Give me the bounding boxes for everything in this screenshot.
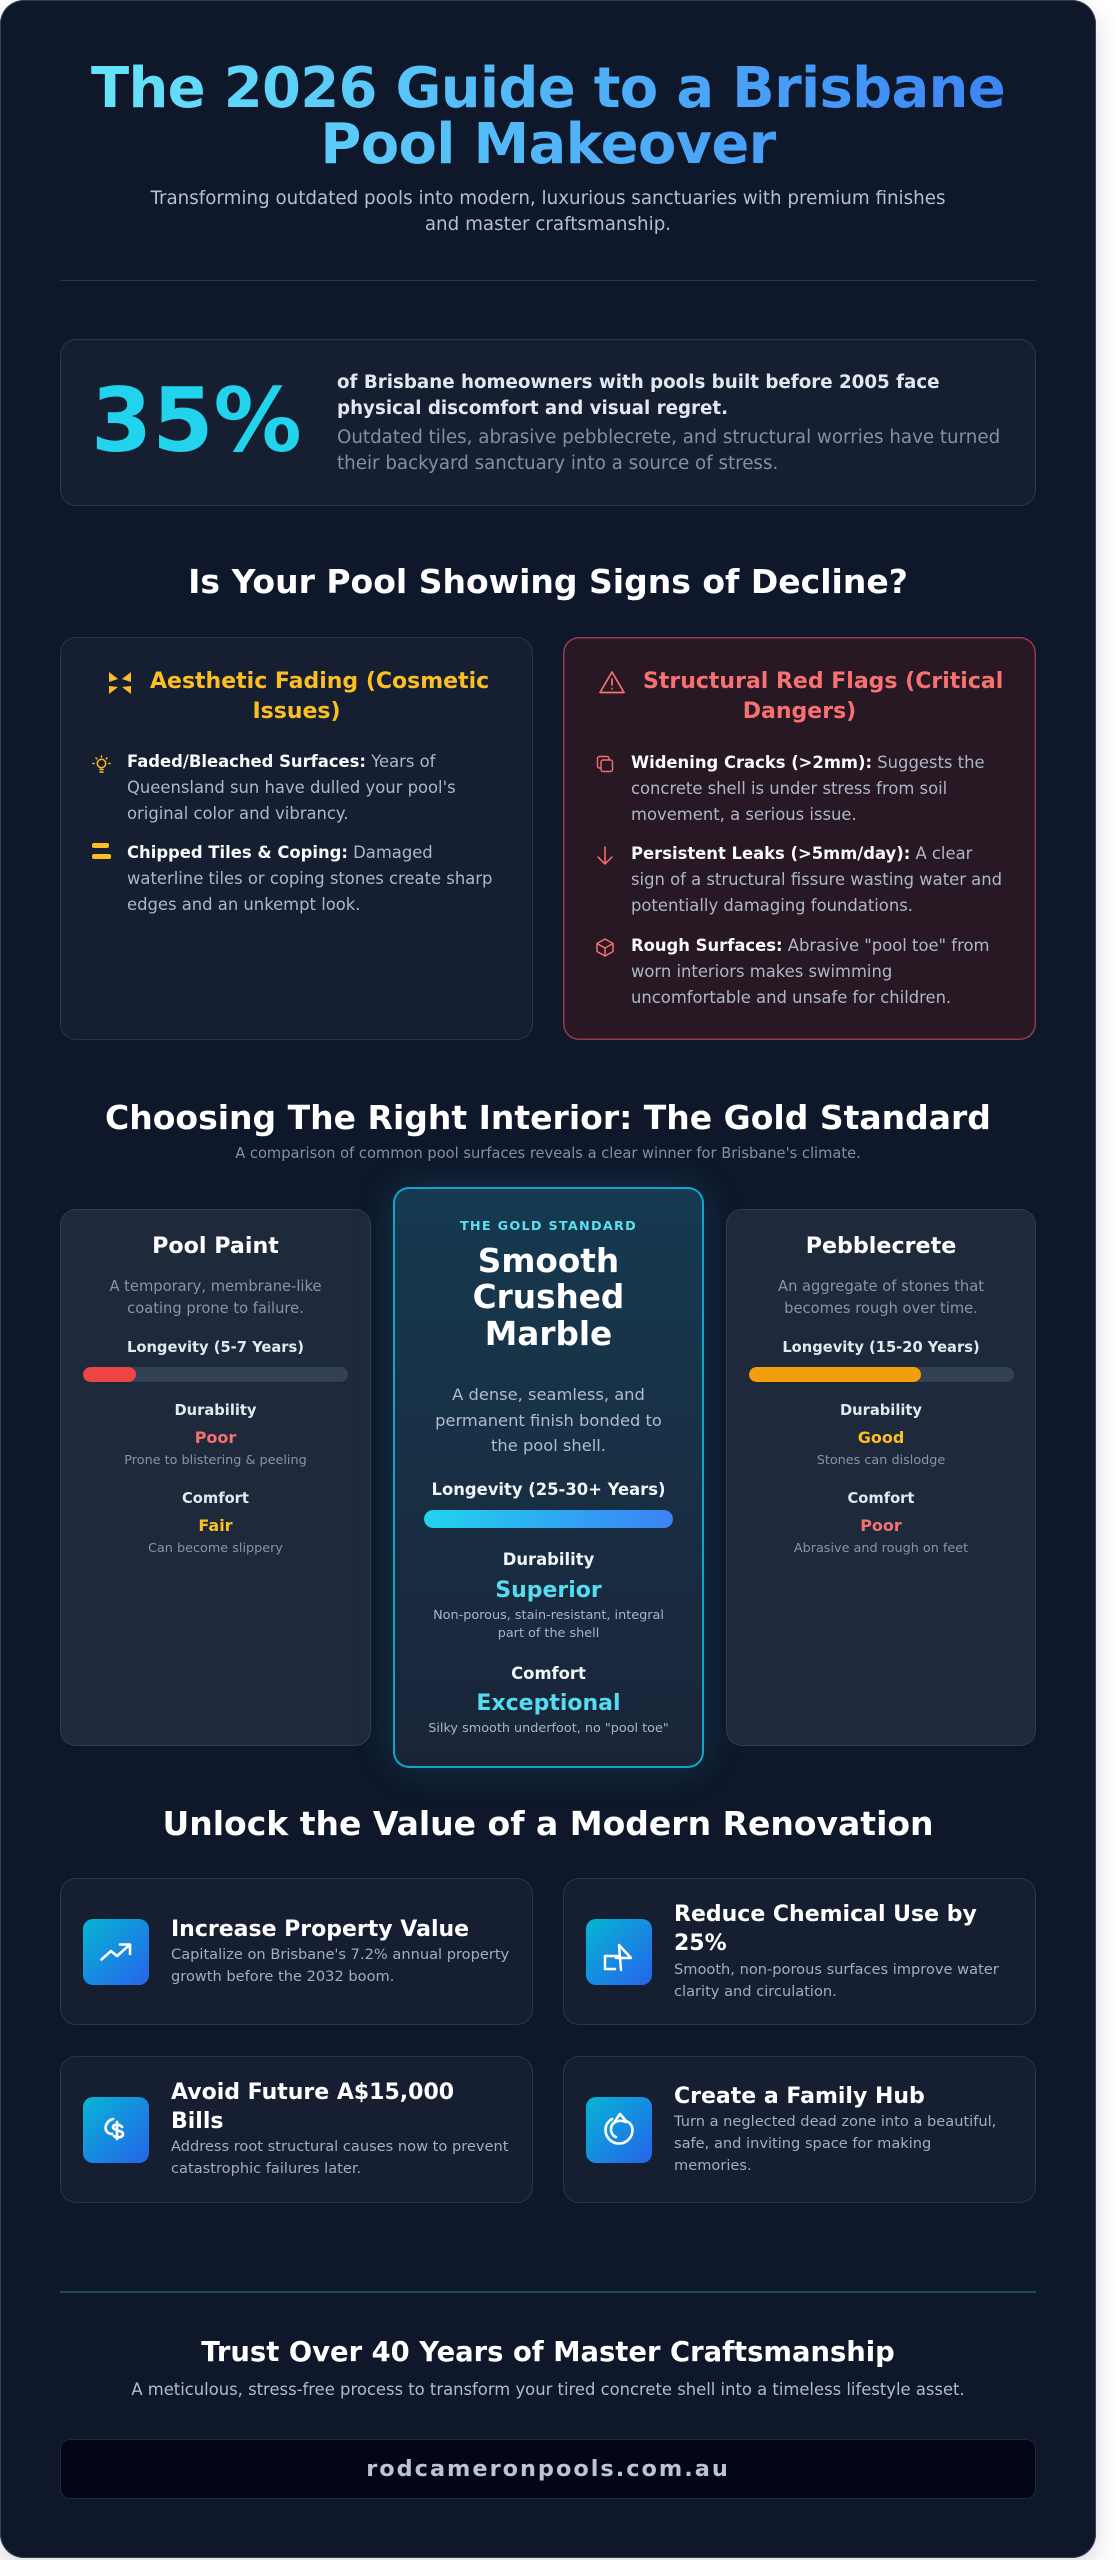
benefit description: Address root structural causes now to prevent: [171, 2138, 508, 2155]
footer heading: Trust Over 40 Years of Master Craftsmanship: [201, 2337, 895, 2368]
list item: cracks: [631, 753, 985, 824]
list item: leaks: Persistent Leaks (>5mm/day): A clear: [631, 844, 972, 863]
benefit description: Turn a neglected dead zone into a beautiful,: [674, 2113, 996, 2130]
card description: An aggregate of stones that: [778, 1278, 984, 1294]
list item: leaks: [631, 844, 1002, 915]
icon: dollar: [83, 2097, 149, 2163]
list item: rough surfaces: [631, 936, 989, 1007]
comfort label: Comfort: [511, 1664, 586, 1683]
list item: cracks: movement, a serious issue.: [631, 805, 857, 824]
stat headline: of Brisbane homeowners with pools built before 2005 face: [337, 372, 940, 393]
heading: unlock value: Unlock the Value of a Modern Renovation: [162, 1804, 934, 1843]
longevity label: Longevity (25-30+ Years): [432, 1480, 665, 1499]
section subheading: A comparison of common pool surfaces reveals a clear winner for Brisbane's climate.: [235, 1145, 861, 1162]
icon: aesthetic: [109, 672, 131, 694]
benefit description: catastrophic failures later.: [171, 2160, 361, 2177]
icon: family hub: [586, 2097, 652, 2163]
comfort note: Silky smooth underfoot, no "pool toe": [428, 1721, 669, 1736]
website callout: [60, 2439, 1036, 2499]
longevity bar: [424, 1510, 673, 1528]
benefit description: [674, 2113, 996, 2174]
list item: faded surfaces: original color and vibrancy.: [127, 804, 349, 823]
list item: leaks: sign of a structural fissure wasting water and: [631, 870, 1002, 889]
list item: chipped tiles: edges and an unkempt look.: [127, 895, 361, 914]
list item: faded surfaces: Queensland sun have dulled your pool's: [127, 778, 456, 797]
card title: Pool Paint: [152, 1233, 279, 1259]
panel: pebblecrete: [726, 1209, 1036, 1746]
benefit description: memories.: [674, 2157, 752, 2174]
durability rating: Good: [858, 1428, 904, 1447]
list item: cracks: concrete shell is under stress from soil: [631, 779, 947, 798]
durability label: Durability: [174, 1402, 256, 1419]
list item: chipped tiles: [127, 843, 492, 914]
stat description: Outdated tiles, abrasive pebblecrete, and structural worries have turned: [337, 427, 1000, 448]
panel: pool paint: [60, 1209, 371, 1746]
durability note: Stones can dislodge: [817, 1453, 945, 1468]
comfort rating: Poor: [860, 1516, 902, 1535]
list item: rough surfaces: uncomfortable and unsafe for children.: [631, 988, 951, 1007]
badge: THE GOLD STANDARD: [460, 1219, 637, 1234]
panel: increase property value: [60, 1878, 533, 2025]
comfort rating: Exceptional: [476, 1691, 621, 1716]
card description: coating prone to failure.: [127, 1300, 304, 1316]
title: Pool Makeover: [320, 112, 776, 177]
comfort label: Comfort: [182, 1490, 249, 1507]
panel: reduce chemical use: [563, 1878, 1036, 2025]
icon: box: [596, 938, 614, 957]
benefit title: Bills: [171, 2108, 224, 2134]
stat headline: [337, 372, 940, 419]
icon: bulb: [92, 755, 111, 773]
durability note: Prone to blistering & peeling: [124, 1453, 307, 1468]
card description: the pool shell.: [491, 1436, 606, 1455]
panel: structural red flags: [563, 637, 1036, 1040]
card description: A dense, seamless, and: [452, 1385, 645, 1404]
longevity label: Longevity (15-20 Years): [782, 1339, 980, 1356]
panel: family hub: [563, 2056, 1036, 2203]
panel: avoid future bills: [60, 2056, 533, 2203]
website callout: rodcameronpools.com.au: [366, 2456, 730, 2482]
list item: faded surfaces: [127, 752, 456, 823]
panel heading second line: Issues): [252, 699, 341, 724]
benefit description: [674, 1961, 999, 2000]
durability rating: Poor: [195, 1428, 236, 1447]
icon: trending up: [83, 1919, 149, 1985]
title: The 2026 Guide to a Brisbane: [91, 56, 1005, 121]
durability note: [433, 1608, 664, 1641]
icon: arrow down: [597, 846, 613, 865]
longevity label: Longevity (5-7 Years): [127, 1339, 304, 1356]
stat description: their backyard sanctuary into a source of stress.: [337, 453, 778, 474]
stat number: 35%: [91, 369, 302, 472]
icon: chipped tiles: [92, 843, 111, 859]
list item: rough surfaces: worn interiors makes swimming: [631, 962, 892, 981]
durability note: Non-porous, stain-resistant, integral: [433, 1608, 664, 1623]
benefit description: Smooth, non-porous surfaces improve water: [674, 1961, 999, 1978]
card title: Marble: [485, 1315, 612, 1353]
heading: choosing interior: Choosing The Right Interior: The Gold Standard: [105, 1098, 991, 1137]
durability label: Durability: [503, 1550, 594, 1569]
card description: [778, 1278, 984, 1316]
list item: cracks: Widening Cracks (>2mm): Suggests the: [631, 753, 985, 772]
card title: Crushed: [473, 1278, 624, 1316]
heading: signs of decline: Is Your Pool Showing Signs of Decline?: [188, 562, 908, 601]
comfort note: Can become slippery: [148, 1541, 283, 1556]
benefit title: 25%: [674, 1930, 727, 1956]
list item: chipped tiles: waterline tiles or coping stones create sharp: [127, 869, 492, 888]
benefit description: [171, 1946, 509, 1985]
card description: [435, 1385, 662, 1455]
benefit description: clarity and circulation.: [674, 1983, 837, 2000]
card title: [473, 1242, 624, 1353]
list item: rough surfaces: Rough Surfaces: Abrasive "pool toe" from: [631, 936, 989, 955]
durability rating: Superior: [495, 1578, 602, 1603]
panel heading: Aesthetic Fading (Cosmetic: [150, 669, 489, 694]
longevity bar: [749, 1367, 1014, 1382]
comfort label: Comfort: [848, 1490, 914, 1507]
card description: A temporary, membrane-like: [109, 1278, 322, 1294]
card description: permanent finish bonded to: [435, 1411, 662, 1430]
card title: Pebblecrete: [806, 1233, 956, 1259]
panel heading second line: Dangers): [743, 699, 856, 724]
list item: faded surfaces: Faded/Bleached Surfaces: Years of: [127, 752, 435, 771]
benefit title: Increase Property Value: [171, 1916, 469, 1942]
durability note: part of the shell: [498, 1626, 599, 1641]
benefit title: [171, 2080, 454, 2134]
benefit title: Avoid Future A$15,000: [171, 2080, 454, 2104]
icon: cracks: [596, 756, 614, 772]
icon: chemical: [586, 1919, 652, 1985]
card description: [109, 1278, 322, 1316]
benefit description: safe, and inviting space for making: [674, 2135, 931, 2152]
comfort note: Abrasive and rough on feet: [794, 1541, 968, 1556]
subtitle: and master craftsmanship.: [425, 214, 671, 235]
title: [60, 61, 1036, 173]
longevity bar: [83, 1367, 348, 1382]
list item: chipped tiles: Chipped Tiles & Coping: Damaged: [127, 843, 433, 862]
panel: smooth crushed marble: [393, 1187, 704, 1768]
subtitle: Transforming outdated pools into modern, luxurious sanctuaries with premium finishes: [150, 188, 946, 209]
subtitle: [150, 188, 946, 235]
panel: 35% stat: [60, 339, 1036, 506]
panel heading: Structural Red Flags (Critical: [643, 669, 1003, 694]
stat headline: physical discomfort and visual regret.: [337, 398, 728, 419]
panel: aesthetic fading: [60, 637, 533, 1040]
benefit title: Reduce Chemical Use by: [674, 1902, 977, 1926]
comfort rating: Fair: [198, 1516, 233, 1535]
footer description: A meticulous, stress-free process to transform your tired concrete shell into a timeless lifestyle asset.: [131, 2380, 965, 2399]
card title: Smooth: [478, 1242, 619, 1280]
card description: becomes rough over time.: [784, 1300, 978, 1316]
durability label: Durability: [840, 1402, 922, 1419]
benefit description: [171, 2138, 508, 2177]
benefit description: growth before the 2032 boom.: [171, 1968, 394, 1985]
stat description: [337, 427, 1000, 474]
list item: leaks: potentially damaging foundations.: [631, 896, 913, 915]
icon: warning triangle: [599, 671, 625, 694]
benefit description: Capitalize on Brisbane's 7.2% annual property: [171, 1946, 509, 1963]
benefit title: Create a Family Hub: [674, 2084, 925, 2108]
benefit title: [674, 1902, 977, 1956]
